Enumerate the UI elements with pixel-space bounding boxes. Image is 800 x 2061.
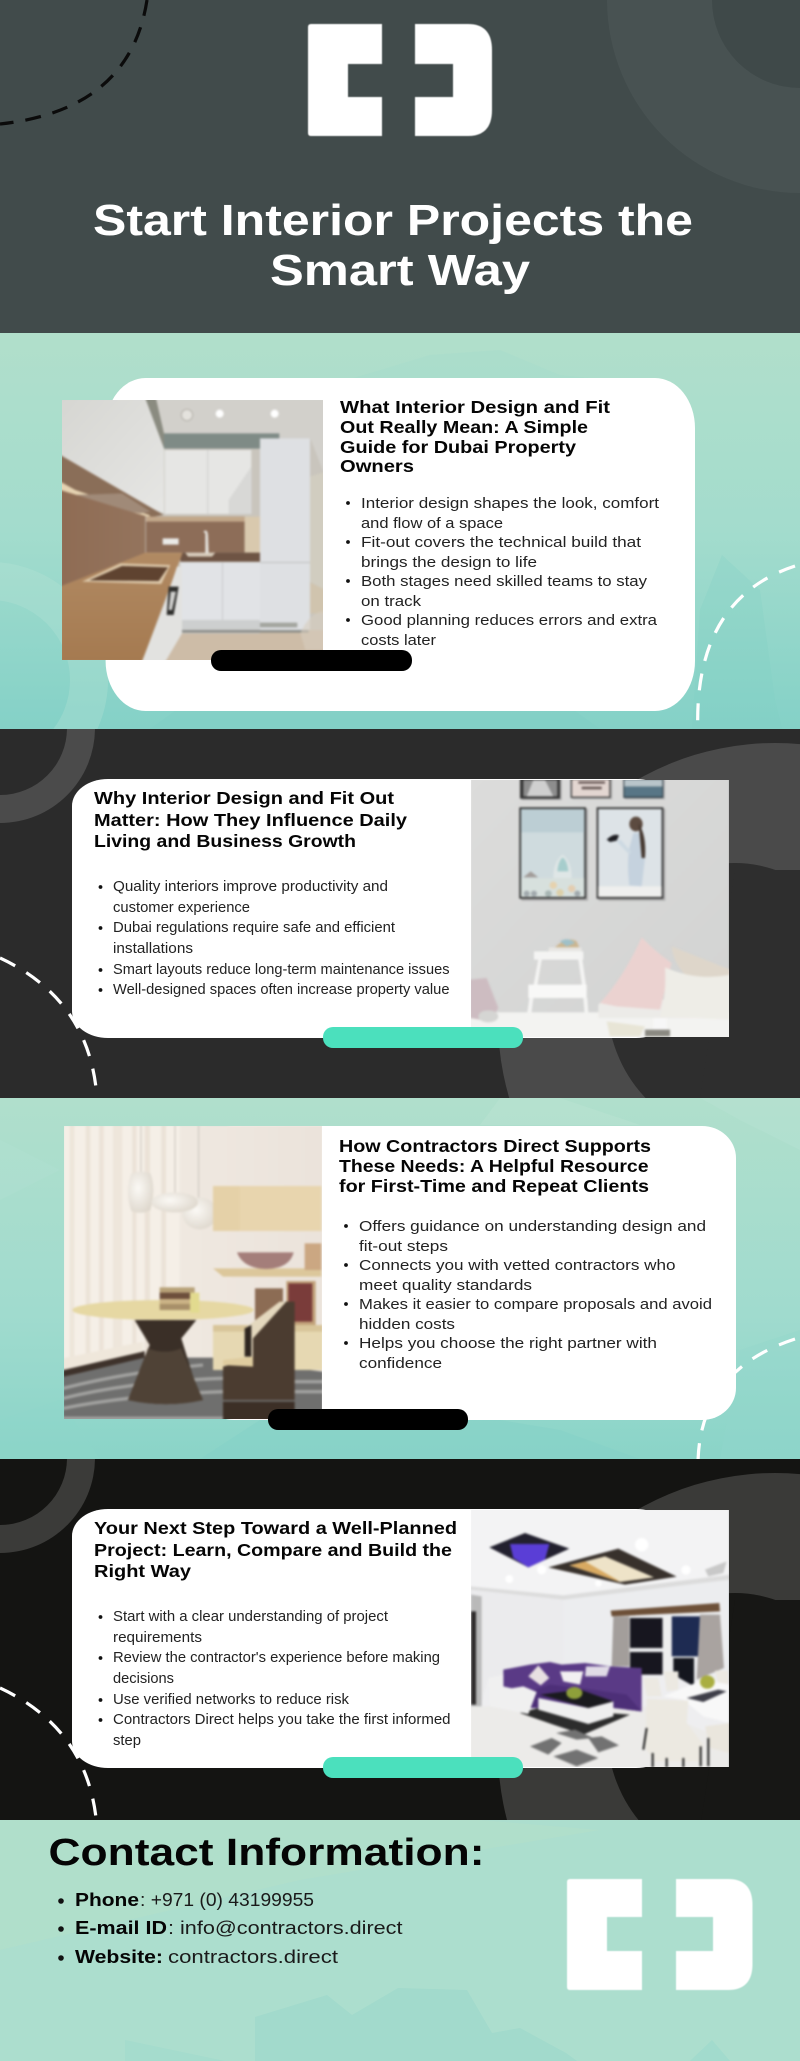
title text: for First-Time and Repeat Clients <box>339 1176 649 1196</box>
title text: Your Next Step Toward a Well-Planned <box>94 1518 457 1538</box>
title: Smart Way <box>270 246 531 295</box>
card <box>72 1509 672 1768</box>
title text: Right Way <box>94 1561 191 1581</box>
contact: phone <box>58 1890 314 1910</box>
title text: Living and Business Growth <box>94 831 356 851</box>
bullet list <box>99 1608 450 1749</box>
card <box>106 378 695 711</box>
bullet list: Well-designed spaces often increase property value <box>113 981 450 998</box>
panel: how contractors direct supports <box>0 1098 800 1462</box>
title text: How Contractors Direct Supports <box>339 1136 651 1156</box>
image: white room with framed prints <box>468 778 732 1042</box>
bullet list: customer experience <box>113 899 250 916</box>
bullet list: meet quality standards <box>359 1277 532 1294</box>
bullet list: Interior design shapes the look, comfort <box>361 495 660 512</box>
image: living room <box>470 1508 730 1771</box>
bullet list: Smart layouts reduce long-term maintenance issues <box>113 961 450 978</box>
bullet list: Dubai regulations require safe and efficient <box>113 919 396 936</box>
title text <box>94 788 407 851</box>
image: dining table <box>63 1125 323 1422</box>
title text: Matter: How They Influence Daily <box>94 810 407 830</box>
contact: phone: : +971 (0) 43199955 <box>140 1890 314 1910</box>
contact: website: Website: <box>75 1947 163 1967</box>
bullet list: costs later <box>361 632 436 649</box>
card <box>72 779 672 1038</box>
bullet list: requirements <box>113 1629 202 1646</box>
bullet list: step <box>113 1732 141 1749</box>
pill: black <box>211 650 412 671</box>
title text: Project: Learn, Compare and Build the <box>94 1540 452 1560</box>
title text: Guide for Dubai Property <box>340 437 576 457</box>
pill: teal <box>323 1027 523 1048</box>
title text <box>339 1136 651 1196</box>
title <box>93 196 693 295</box>
bullet list: confidence <box>359 1355 442 1372</box>
bullet list: Helps you choose the right partner with <box>359 1335 657 1352</box>
pill: black <box>268 1409 468 1430</box>
pill: teal <box>323 1757 523 1778</box>
title text: Why Interior Design and Fit Out <box>94 788 394 808</box>
contact: website: contractors.direct <box>168 1947 338 1967</box>
contact: website <box>58 1947 338 1967</box>
bullet list: fit-out steps <box>359 1238 448 1255</box>
title text: What Interior Design and Fit <box>340 397 610 417</box>
title text <box>340 397 610 476</box>
bullet list: installations <box>113 940 193 957</box>
bullet list: on track <box>361 593 422 610</box>
bullet list: Start with a clear understanding of project <box>113 1608 389 1625</box>
contact: email <box>58 1918 402 1938</box>
bullet list: Offers guidance on understanding design and <box>359 1218 706 1235</box>
contact: email: : info@contractors.direct <box>168 1918 402 1938</box>
panel: your next step <box>0 1459 800 1820</box>
bullet list: Good planning reduces errors and extra <box>361 612 658 629</box>
icon: logo <box>308 24 492 136</box>
panel: header <box>0 0 800 333</box>
bullet list <box>344 1218 712 1372</box>
icon: logo <box>567 1879 752 1990</box>
title: Start Interior Projects the <box>93 196 693 245</box>
title text: These Needs: A Helpful Resource <box>339 1156 649 1176</box>
bullet list: Both stages need skilled teams to stay <box>361 573 648 590</box>
bullet list: hidden costs <box>359 1316 455 1333</box>
bullet list: Review the contractor's experience before making <box>113 1649 440 1666</box>
bullet list <box>99 878 449 998</box>
bullet list: Fit-out covers the technical build that <box>361 534 642 551</box>
contact: email: E-mail ID <box>75 1918 167 1938</box>
panel: what interior design and fit out mean <box>0 333 800 729</box>
title text: Owners <box>340 456 414 476</box>
title text: Out Really Mean: A Simple <box>340 417 588 437</box>
panel: why interior design and fit out matter <box>0 729 800 1098</box>
bullet list <box>346 495 660 649</box>
contact heading: Contact Information: <box>48 1832 484 1874</box>
bullet list: decisions <box>113 1670 174 1687</box>
bullet list: Quality interiors improve productivity and <box>113 878 388 895</box>
bullet list: and flow of a space <box>361 515 503 532</box>
title text <box>94 1518 457 1581</box>
bullet list: Connects you with vetted contractors who <box>359 1257 676 1274</box>
bullet list: Makes it easier to compare proposals and avoid <box>359 1296 712 1313</box>
image: kitchen <box>60 398 325 663</box>
bullet list: Use verified networks to reduce risk <box>113 1691 349 1708</box>
bullet list: brings the design to life <box>361 554 537 571</box>
bullet list: Contractors Direct helps you take the first informed <box>113 1711 450 1728</box>
card <box>200 1126 736 1420</box>
contact: phone: Phone <box>75 1890 139 1910</box>
panel: contact information <box>0 1820 800 2061</box>
